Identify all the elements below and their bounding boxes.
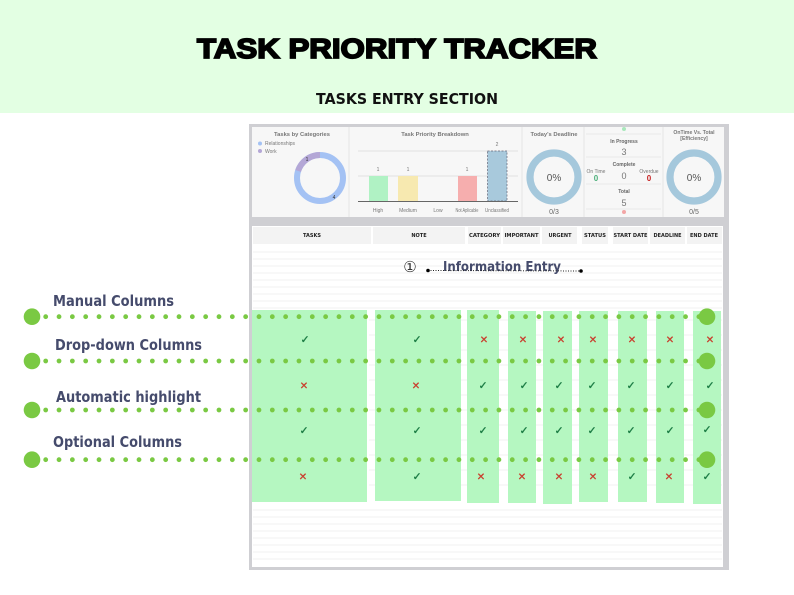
panel: task status summary: In Progress — [610, 139, 638, 145]
table header row: DEADLINE — [654, 233, 682, 239]
panel: task priority breakdown chart: Not Aplicable — [456, 208, 479, 214]
panel: on time vs total efficiency: [Efficiency] — [680, 136, 708, 142]
panel: today's deadline: Today's Deadline — [530, 132, 578, 138]
dotted connector: automatic highlight — [24, 402, 715, 418]
row 3 marks: ✓ — [300, 425, 308, 437]
row 3 marks: ✓ — [413, 425, 421, 437]
dotted connector: manual columns — [24, 308, 715, 325]
table header row — [253, 227, 722, 244]
row 1 marks: ✓ — [301, 334, 309, 346]
row 3 marks: ✓ — [627, 425, 635, 437]
row 1 marks: ✕ — [589, 335, 597, 346]
row 1 marks: ✕ — [706, 335, 714, 346]
panel: tasks by categories — [252, 127, 348, 217]
panel: task status summary — [585, 127, 662, 217]
row 3 marks: ✓ — [588, 425, 596, 437]
panel: task status summary: 0 — [594, 174, 599, 183]
panel: today's deadline: 0% — [547, 173, 561, 184]
row 2 marks: ✕ — [300, 381, 308, 392]
panel: task status summary: Complete — [613, 162, 636, 168]
row 1 marks: ✕ — [666, 335, 674, 346]
row 3 marks: ✓ — [479, 425, 487, 437]
row 2 marks: ✓ — [520, 380, 528, 392]
information entry callout: ① — [403, 258, 417, 276]
row 4 marks: ✕ — [518, 472, 526, 483]
row 1 marks: ✕ — [557, 335, 565, 346]
header band — [0, 0, 794, 113]
panel: task status summary: On Time — [587, 169, 606, 175]
row 2 marks: ✓ — [555, 380, 563, 392]
panel: task priority breakdown chart: Unclassified — [485, 208, 509, 214]
table header row: TASKS — [303, 233, 321, 239]
table header row: URGENT — [548, 233, 572, 239]
panel: task priority breakdown chart: 1 — [466, 167, 469, 173]
panel: tasks by categories: Work — [265, 149, 277, 155]
row 1 marks: ✓ — [413, 334, 421, 346]
panel: on time vs total efficiency: 0% — [687, 173, 701, 184]
row 1 marks: ✕ — [519, 335, 527, 346]
spreadsheet frame — [249, 124, 729, 570]
table header row: END DATE — [690, 233, 719, 239]
label: automatic highlight: Automatic highlight — [56, 388, 201, 406]
panel: today's deadline: 0/3 — [549, 209, 559, 216]
row 2 marks — [300, 380, 714, 392]
row 2 marks: ✕ — [412, 381, 420, 392]
information entry callout — [403, 258, 583, 276]
table row lines — [253, 252, 722, 559]
panel: task priority breakdown chart — [350, 127, 521, 217]
panel: tasks by categories: Relationships — [265, 141, 296, 147]
row 4 marks — [299, 471, 711, 483]
row 1 marks: ✕ — [480, 335, 488, 346]
dotted connector: drop-down columns — [24, 353, 715, 369]
panel: on time vs total efficiency: 0/5 — [689, 209, 699, 216]
table header row: STATUS — [584, 233, 606, 239]
panel: today's deadline — [523, 127, 583, 217]
panel: task priority breakdown chart: 1 — [407, 167, 410, 173]
panel: task status summary: Overdue — [639, 169, 659, 175]
row 4 marks: ✕ — [555, 472, 563, 483]
row 4 marks: ✓ — [413, 471, 421, 483]
label: manual columns: Manual Columns — [53, 292, 174, 310]
panel: task priority breakdown chart: Medium — [399, 208, 417, 214]
row 3 marks: ✓ — [666, 425, 674, 437]
information entry callout: Information Entry — [443, 260, 561, 275]
label: optional columns: Optional Columns — [53, 433, 182, 451]
table header row: IMPORTANT — [504, 233, 539, 239]
row 4 marks: ✓ — [703, 471, 711, 483]
title: TASK PRIORITY TRACKER — [197, 33, 597, 64]
row 3 marks: ✓ — [703, 424, 711, 436]
row 2 marks: ✓ — [588, 380, 596, 392]
row 1 marks: ✕ — [628, 335, 636, 346]
panel: task priority breakdown chart: Low — [433, 208, 443, 214]
panel: task status summary: 3 — [621, 147, 627, 157]
row 2 marks: ✓ — [706, 380, 714, 392]
row 3 marks — [300, 424, 711, 437]
row 4 marks: ✕ — [477, 472, 485, 483]
row 1 marks — [301, 334, 714, 346]
panel: tasks by categories: 4 — [333, 195, 336, 201]
table header row: NOTE — [411, 233, 427, 239]
row 4 marks: ✕ — [299, 472, 307, 483]
highlighted green columns — [252, 310, 721, 504]
row 2 marks: ✓ — [479, 380, 487, 392]
panel: task priority breakdown chart: Task Priority Breakdown — [401, 132, 469, 138]
panel: tasks by categories: 1 — [306, 157, 309, 163]
panel: tasks by categories: Tasks by Categories — [274, 132, 330, 138]
panel: task status summary: Total — [618, 189, 630, 195]
panel: task priority breakdown chart: High — [373, 208, 383, 214]
section subtitle: TASKS ENTRY SECTION — [316, 90, 498, 108]
label: drop-down columns: Drop-down Columns — [55, 336, 202, 354]
panel: on time vs total efficiency: OnTime Vs. Total — [673, 130, 715, 136]
panel: task status summary: 0 — [621, 171, 627, 181]
row 4 marks: ✓ — [628, 471, 636, 483]
row 2 marks: ✓ — [627, 380, 635, 392]
table header row: CATEGORY — [469, 233, 500, 239]
row 3 marks: ✓ — [555, 425, 563, 437]
row 4 marks: ✕ — [665, 472, 673, 483]
panel: on time vs total efficiency — [664, 127, 724, 217]
row 2 marks: ✓ — [666, 380, 674, 392]
panel: task status summary: 0 — [647, 174, 652, 183]
panel: task status summary: 5 — [621, 198, 627, 208]
panel: task priority breakdown chart: 1 — [377, 167, 380, 173]
row 3 marks: ✓ — [520, 425, 528, 437]
row 4 marks: ✕ — [589, 472, 597, 483]
dotted connector: optional columns — [24, 451, 715, 468]
panel: task priority breakdown chart: 2 — [496, 142, 499, 148]
table header row: START DATE — [614, 233, 648, 239]
